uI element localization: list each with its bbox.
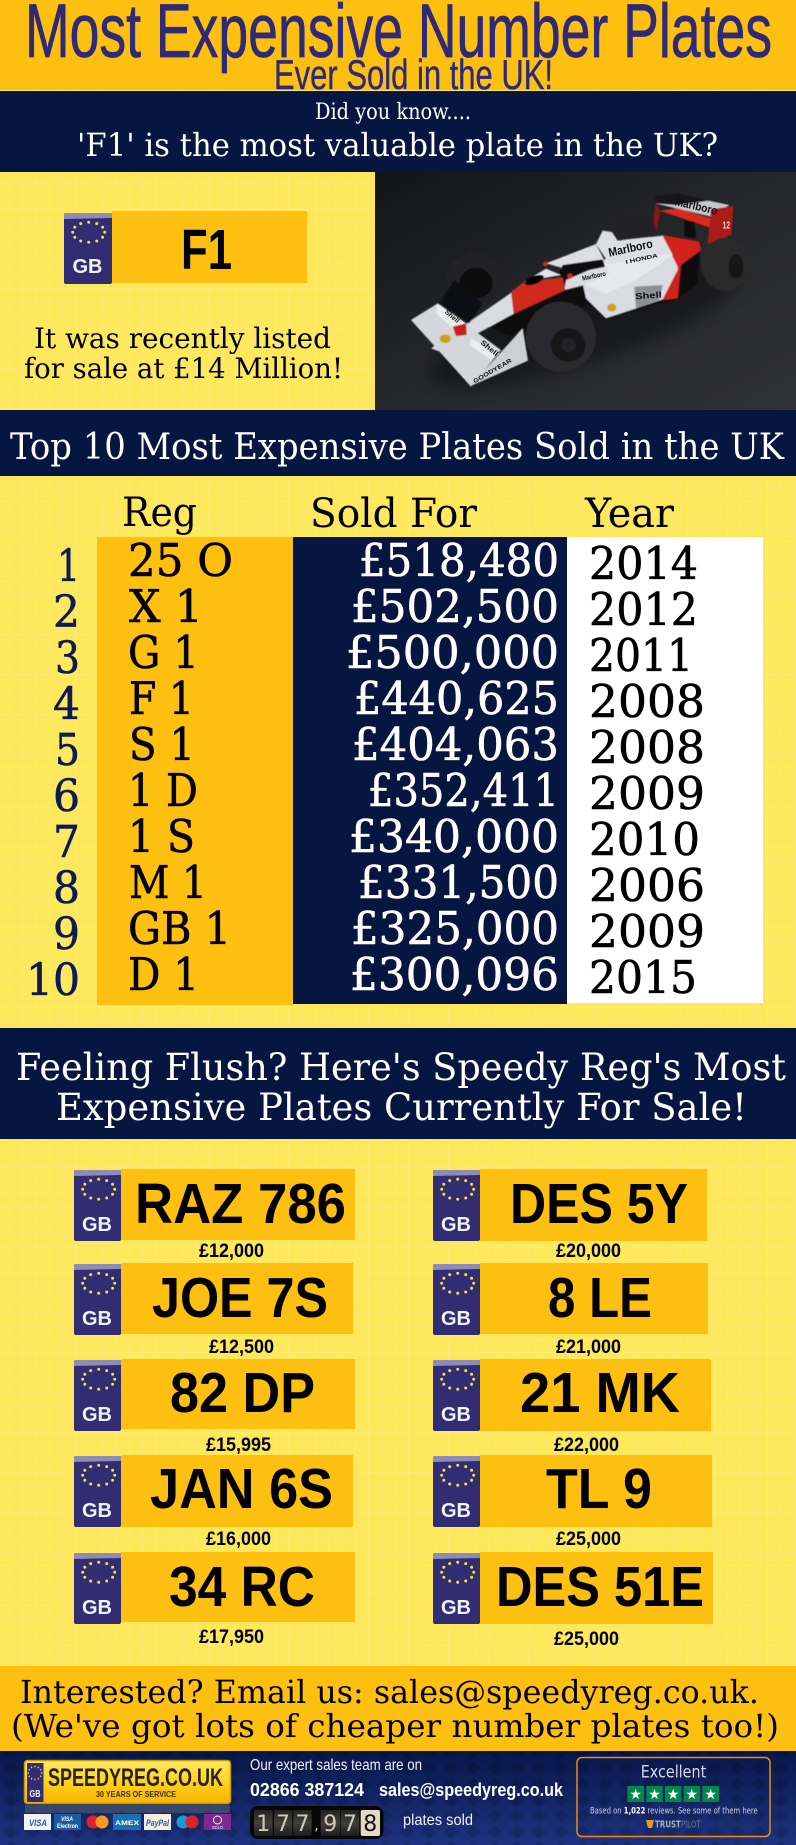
plate: 82 DP — [74, 1359, 355, 1456]
plate: 34 RC — [74, 1552, 355, 1648]
plate: TL 9: TL 9 — [546, 1457, 652, 1521]
contact details: sales@speedyreg.co.uk — [379, 1780, 564, 1800]
column: year: 2009 — [589, 767, 705, 820]
listing text: It was recently listed — [34, 322, 331, 355]
plate: DES 51E: £25,000 — [554, 1629, 619, 1650]
column: sold for: £502,500 — [351, 580, 559, 633]
trustpilot rating box: Excellent — [641, 1762, 706, 1782]
footer — [0, 1751, 796, 1845]
speedyreg logo plate: GB — [30, 1789, 40, 1800]
payment card icons: SOLO — [212, 1825, 223, 1830]
plate: DES 5Y: £20,000 — [556, 1241, 621, 1262]
rank numbers: 4 — [53, 679, 80, 730]
plate: 82 DP: GB — [82, 1404, 112, 1426]
car livery text: I HONDA — [625, 253, 658, 266]
plate: 34 RC: 34 RC — [169, 1555, 315, 1619]
column: sold for: £518,480 — [359, 534, 559, 587]
column: year: 2006 — [589, 859, 705, 912]
payment card icons: VISA — [29, 1818, 47, 1828]
column: sold for — [293, 534, 567, 1004]
F1 fact text: 'F1' is the most valuable plate in the UK? — [77, 126, 718, 164]
plates sold counter: 8 — [363, 1812, 377, 1837]
rank numbers: 5 — [55, 725, 80, 776]
table column headers: Year — [584, 491, 675, 537]
plate: RAZ 786 — [74, 1169, 355, 1262]
rank numbers: 8 — [53, 863, 80, 914]
column: year: 2014 — [589, 537, 698, 590]
plate: JAN 6S — [74, 1455, 353, 1550]
plates sold counter: 1 — [256, 1812, 270, 1837]
column: sold for: £325,000 — [351, 902, 559, 955]
plates sold counter: 9 — [323, 1812, 337, 1837]
contact details — [250, 1757, 564, 1800]
column: sold for: £404,063 — [352, 718, 559, 771]
did you know text: Did you know.... — [315, 100, 471, 125]
rank numbers: 3 — [55, 633, 80, 684]
plate: 21 MK: £22,000 — [554, 1435, 619, 1456]
five star rating: ★ — [667, 1787, 679, 1803]
call to action band — [0, 1666, 796, 1751]
speedyreg logo plate: SPEEDYREG.CO.UK — [48, 1764, 223, 1792]
column: reg: D 1 — [128, 948, 199, 1001]
plate: RAZ 786: £12,000 — [199, 1241, 264, 1262]
rank numbers: 6 — [53, 771, 80, 822]
plates sold counter: 7 — [276, 1812, 290, 1837]
plate: DES 51E: GB — [441, 1597, 471, 1619]
payment card icons: Electron — [57, 1824, 78, 1830]
column: year: 2009 — [589, 905, 705, 958]
five star rating: ★ — [686, 1787, 698, 1803]
payment card icons: VISA — [61, 1817, 73, 1823]
column: year: 2008 — [589, 721, 705, 774]
payment card icons: PayPal — [146, 1818, 169, 1828]
heading band: for sale: Feeling Flush? Here's Speedy Reg's Most — [16, 1046, 786, 1089]
trustpilot rating box: TRUSTPILOT — [655, 1820, 701, 1830]
car livery text: Marlboro — [607, 237, 654, 260]
F1 number plate — [64, 211, 307, 284]
plate: JOE 7S: GB — [82, 1308, 112, 1330]
plate: 21 MK: 21 MK — [520, 1361, 680, 1425]
column: reg: S 1 — [129, 718, 195, 771]
plates sold counter: 7 — [343, 1812, 357, 1837]
plate: 21 MK — [433, 1359, 711, 1456]
car livery text: GOODYEAR — [473, 358, 514, 385]
speedyreg logo plate: 30 YEARS OF SERVICE — [96, 1789, 176, 1799]
plate: 8 LE: 8 LE — [548, 1266, 652, 1330]
car livery text: Shell — [443, 309, 460, 325]
plate: JOE 7S: £12,500 — [209, 1337, 274, 1358]
five star rating — [627, 1786, 719, 1803]
table: top 10 plates — [26, 490, 763, 1006]
plates sold counter: , — [314, 1818, 319, 1834]
plate: JOE 7S — [74, 1263, 353, 1358]
plate: 82 DP: £15,995 — [206, 1435, 271, 1456]
panel: plates for sale — [74, 1169, 713, 1650]
column: year: 2010 — [589, 813, 700, 866]
column: reg: 1 S — [128, 810, 195, 863]
car livery text: Marlboro — [674, 196, 719, 218]
call to action band: (We've got lots of cheaper number plates too!) — [11, 1707, 779, 1745]
plates sold counter — [250, 1806, 384, 1839]
trustpilot rating box: Based on 1,022 reviews. See some of them here — [590, 1807, 758, 1817]
trustpilot rating box — [577, 1758, 770, 1836]
column: year — [567, 537, 763, 1004]
table column headers: Reg — [122, 490, 197, 536]
rank numbers — [26, 541, 80, 1006]
five star rating: ★ — [704, 1787, 717, 1803]
listing text — [24, 322, 343, 385]
plate: 82 DP: 82 DP — [170, 1361, 315, 1425]
plate: 34 RC: GB — [82, 1597, 112, 1619]
column: sold for: £300,096 — [350, 948, 559, 1001]
column: reg: 25 O — [128, 534, 233, 587]
plate: RAZ 786: RAZ 786 — [135, 1172, 346, 1236]
plate: 8 LE: £21,000 — [556, 1337, 621, 1358]
column: reg: M 1 — [129, 856, 207, 909]
payment card icons: AMEX — [115, 1821, 139, 1827]
plate: DES 5Y: DES 5Y — [510, 1172, 688, 1236]
heading band: for sale: Expensive Plates Currently For Sale! — [56, 1086, 747, 1129]
contact details: 02866 387124 — [250, 1780, 364, 1800]
column: year: 2008 — [589, 675, 705, 728]
plate: DES 5Y: GB — [441, 1214, 471, 1236]
car livery text — [443, 196, 719, 385]
F1 number plate: F1 — [181, 218, 232, 282]
column: sold for: £440,625 — [354, 672, 559, 725]
car livery text: Shell — [635, 289, 662, 301]
rank numbers: 10 — [26, 955, 80, 1006]
column: sold for: £331,500 — [358, 856, 559, 909]
payment card icons — [24, 1814, 231, 1830]
photo: McLaren F1 car — [375, 172, 796, 411]
plate: 8 LE — [433, 1263, 708, 1358]
photo: McLaren F1 car: 12 — [723, 220, 730, 231]
call to action band: Interested? Email us: sales@speedyreg.co.uk. — [20, 1673, 759, 1711]
plate: TL 9: GB — [441, 1500, 471, 1522]
column: sold for: £352,411 — [368, 764, 559, 817]
five star rating: ★ — [648, 1787, 661, 1803]
column: reg: X 1 — [129, 580, 203, 633]
plate: 34 RC: £17,950 — [199, 1627, 264, 1648]
F1 number plate: GB — [72, 256, 102, 278]
did you know band — [0, 91, 796, 172]
plate: DES 5Y — [433, 1169, 707, 1262]
plate: JAN 6S: JAN 6S — [150, 1457, 333, 1521]
panel: F1 plate — [0, 172, 375, 410]
column: reg: G 1 — [128, 626, 199, 679]
plate: DES 51E: DES 51E — [496, 1555, 704, 1619]
column: year: 2011 — [589, 629, 693, 682]
subtitle: Ever Sold in the UK! — [274, 51, 553, 98]
column: sold for: £340,000 — [349, 810, 559, 863]
column: sold for: £500,000 — [346, 626, 559, 679]
column: reg — [97, 534, 293, 1005]
five star rating: ★ — [629, 1787, 642, 1803]
heading band: top 10 — [0, 410, 796, 476]
plate: JAN 6S: £16,000 — [206, 1529, 271, 1550]
plate: JOE 7S: JOE 7S — [152, 1266, 328, 1330]
rank numbers: 2 — [53, 587, 80, 638]
contact details: Our expert sales team are on — [250, 1757, 422, 1774]
plate: 21 MK: GB — [441, 1404, 471, 1426]
column: reg: 1 D — [128, 764, 198, 817]
plate: TL 9 — [433, 1455, 712, 1550]
title banner — [0, 0, 796, 90]
car livery text: Shell — [479, 338, 500, 358]
listing text: for sale at £14 Million! — [24, 352, 343, 385]
car livery text: Marlboro — [582, 271, 607, 283]
rank numbers: 1 — [57, 541, 80, 592]
plate: 8 LE: GB — [441, 1308, 471, 1330]
rank numbers: 9 — [53, 909, 80, 960]
plates sold counter: 7 — [296, 1812, 310, 1837]
column: reg: GB 1 — [128, 902, 231, 955]
heading band: for sale — [0, 1028, 796, 1139]
plate: RAZ 786: GB — [82, 1214, 112, 1236]
table column headers — [122, 490, 675, 537]
column: reg: F 1 — [129, 672, 194, 725]
plate: JAN 6S: GB — [82, 1500, 112, 1522]
column: year: 2015 — [589, 951, 697, 1004]
column: year: 2012 — [589, 583, 698, 636]
rank numbers: 7 — [53, 817, 80, 868]
plate: TL 9: £25,000 — [556, 1529, 621, 1550]
speedyreg logo plate — [24, 1760, 230, 1813]
plates sold label: plates sold — [403, 1812, 473, 1829]
plate: DES 51E — [433, 1552, 713, 1650]
table column headers: Sold For — [310, 491, 478, 537]
